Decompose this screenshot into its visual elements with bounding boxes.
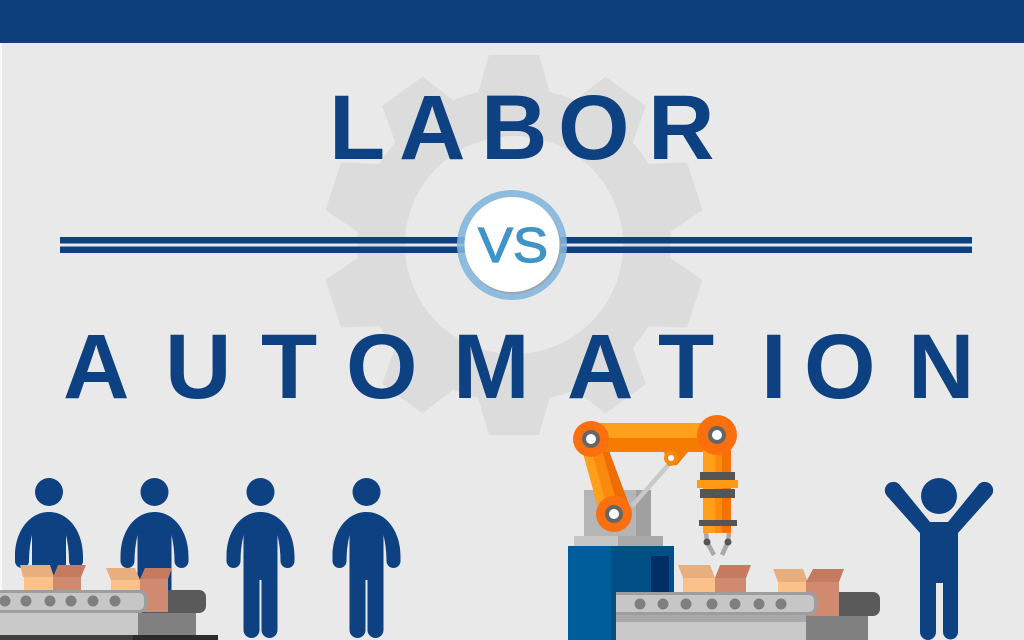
labor side: workers and conveyor xyxy=(0,478,400,640)
icon: robot arm xyxy=(573,415,738,533)
icon: worker 1 xyxy=(15,478,83,638)
title: AUTOMATION: AUTOMATION xyxy=(63,316,974,418)
icon: worker 4 xyxy=(332,478,400,638)
icon: worker 2 xyxy=(120,478,188,638)
icon: worker 3 xyxy=(226,478,294,638)
icon: box 3 xyxy=(678,565,751,592)
automation side: robot, conveyor, worker xyxy=(568,415,993,640)
VS label: VS xyxy=(478,219,548,273)
icon: box 1 xyxy=(20,565,86,590)
title: LABOR: LABOR xyxy=(329,77,714,179)
icon: box 4 xyxy=(773,569,844,616)
icon: left conveyor xyxy=(0,565,218,640)
icon: robot base xyxy=(568,490,674,640)
icon: right conveyor xyxy=(616,565,880,640)
icon: robot gripper xyxy=(704,533,732,555)
top banner xyxy=(0,0,1024,43)
icon: background gear xyxy=(322,55,706,435)
icon: box 2 xyxy=(106,568,172,612)
VS badge xyxy=(457,190,567,300)
divider lines xyxy=(60,237,972,253)
icon: worker with raised arms xyxy=(885,478,993,640)
